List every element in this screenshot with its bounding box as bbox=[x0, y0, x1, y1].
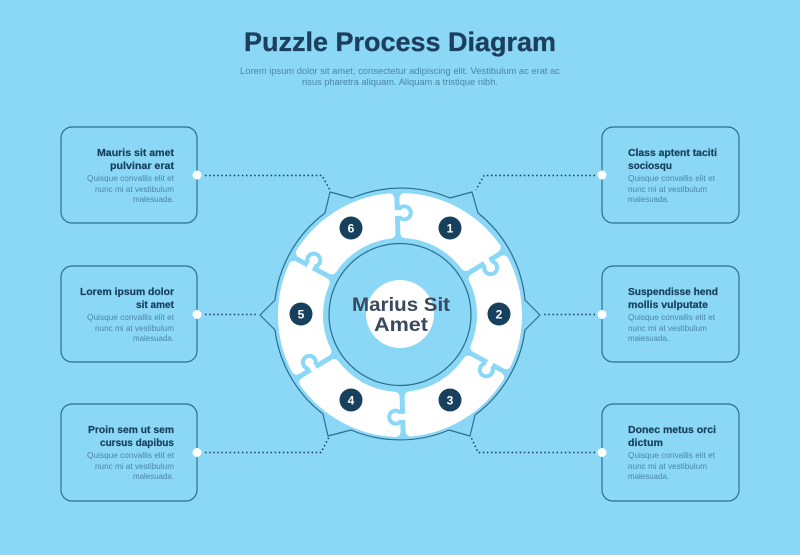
panel: top right: Quisque convallis elit et bbox=[628, 174, 716, 183]
panel: bottom left: malesuada. bbox=[133, 472, 174, 481]
panel: middle right bbox=[602, 266, 739, 362]
center label: Amet bbox=[374, 314, 429, 336]
number badge 2 bbox=[488, 302, 510, 326]
center label bbox=[352, 294, 451, 336]
center label: Marius Sit bbox=[352, 294, 451, 316]
panel: middle left: Quisque convallis elit et bbox=[87, 313, 175, 322]
subtitle text: Lorem ipsum dolor sit amet, consectetur adipiscing elit. Vestibulum ac erat ac bbox=[240, 66, 561, 76]
panel: top right: sociosqu bbox=[628, 160, 672, 172]
number badge 1: 1 bbox=[447, 221, 454, 235]
connector end dots bbox=[192, 170, 606, 457]
panel: middle left bbox=[61, 266, 197, 362]
puzzle ring bbox=[250, 174, 550, 456]
panel: bottom left: Proin sem ut sem bbox=[88, 424, 174, 436]
panel: middle right: Suspendisse hend bbox=[628, 286, 718, 298]
panel: top left: Quisque convallis elit et bbox=[87, 174, 175, 183]
panel: bottom left: nunc mi at vestibulum bbox=[95, 462, 174, 471]
subtitle text bbox=[240, 66, 561, 87]
number badge 5: 5 bbox=[298, 307, 305, 321]
number badge 4: 4 bbox=[348, 393, 355, 407]
panel: middle left: Lorem ipsum dolor bbox=[80, 286, 174, 298]
panel: top left: malesuada. bbox=[133, 195, 174, 204]
panel: middle right: Quisque convallis elit et bbox=[628, 313, 716, 322]
panel: top left bbox=[61, 127, 197, 223]
dotted connectors bbox=[205, 176, 595, 452]
number badge 5 bbox=[290, 302, 312, 326]
panel: bottom left: cursus dapibus bbox=[100, 437, 174, 449]
panel: middle left: sit amet bbox=[136, 299, 174, 311]
outer ring outline with six spikes bbox=[260, 188, 540, 440]
number badge 3 bbox=[438, 388, 462, 412]
panel: middle right: nunc mi at vestibulum bbox=[628, 324, 707, 333]
number badge 6 bbox=[340, 216, 362, 240]
panel: middle right: malesuada. bbox=[628, 334, 669, 343]
panel: bottom right: nunc mi at vestibulum bbox=[628, 462, 707, 471]
title: Puzzle Process Diagram bbox=[244, 27, 556, 57]
panel: bottom right: dictum bbox=[628, 437, 663, 449]
panel: bottom right: Donec metus orci bbox=[628, 424, 716, 436]
panel: bottom left bbox=[61, 404, 197, 501]
panel: top left: Mauris sit amet bbox=[97, 147, 174, 159]
subtitle text: risus pharetra aliquam. Aliquam a tristique nibh. bbox=[302, 77, 498, 87]
panel: top left: pulvinar erat bbox=[110, 160, 175, 172]
inner ring outline bbox=[329, 244, 471, 386]
panel: top right: nunc mi at vestibulum bbox=[628, 185, 707, 194]
center white circle bbox=[366, 280, 434, 348]
panel: bottom right bbox=[602, 404, 739, 501]
panel: bottom right: Quisque convallis elit et bbox=[628, 451, 716, 460]
panel: middle right: mollis vulputate bbox=[628, 299, 708, 311]
panel: top right bbox=[602, 127, 739, 223]
panel: top right: Class aptent taciti bbox=[628, 147, 717, 159]
panel: top right: malesuada. bbox=[628, 195, 669, 204]
panel: top left: nunc mi at vestibulum bbox=[95, 185, 174, 194]
panel: middle left: malesuada. bbox=[133, 334, 174, 343]
number badge 6: 6 bbox=[348, 221, 355, 235]
number badge 3: 3 bbox=[447, 393, 454, 407]
panel: bottom left: Quisque convallis elit et bbox=[87, 451, 175, 460]
number badge 2: 2 bbox=[496, 307, 503, 321]
number badge 4 bbox=[340, 388, 362, 412]
panel: middle left: nunc mi at vestibulum bbox=[95, 324, 174, 333]
number badge 1 bbox=[438, 216, 462, 240]
panel: bottom right: malesuada. bbox=[628, 472, 669, 481]
